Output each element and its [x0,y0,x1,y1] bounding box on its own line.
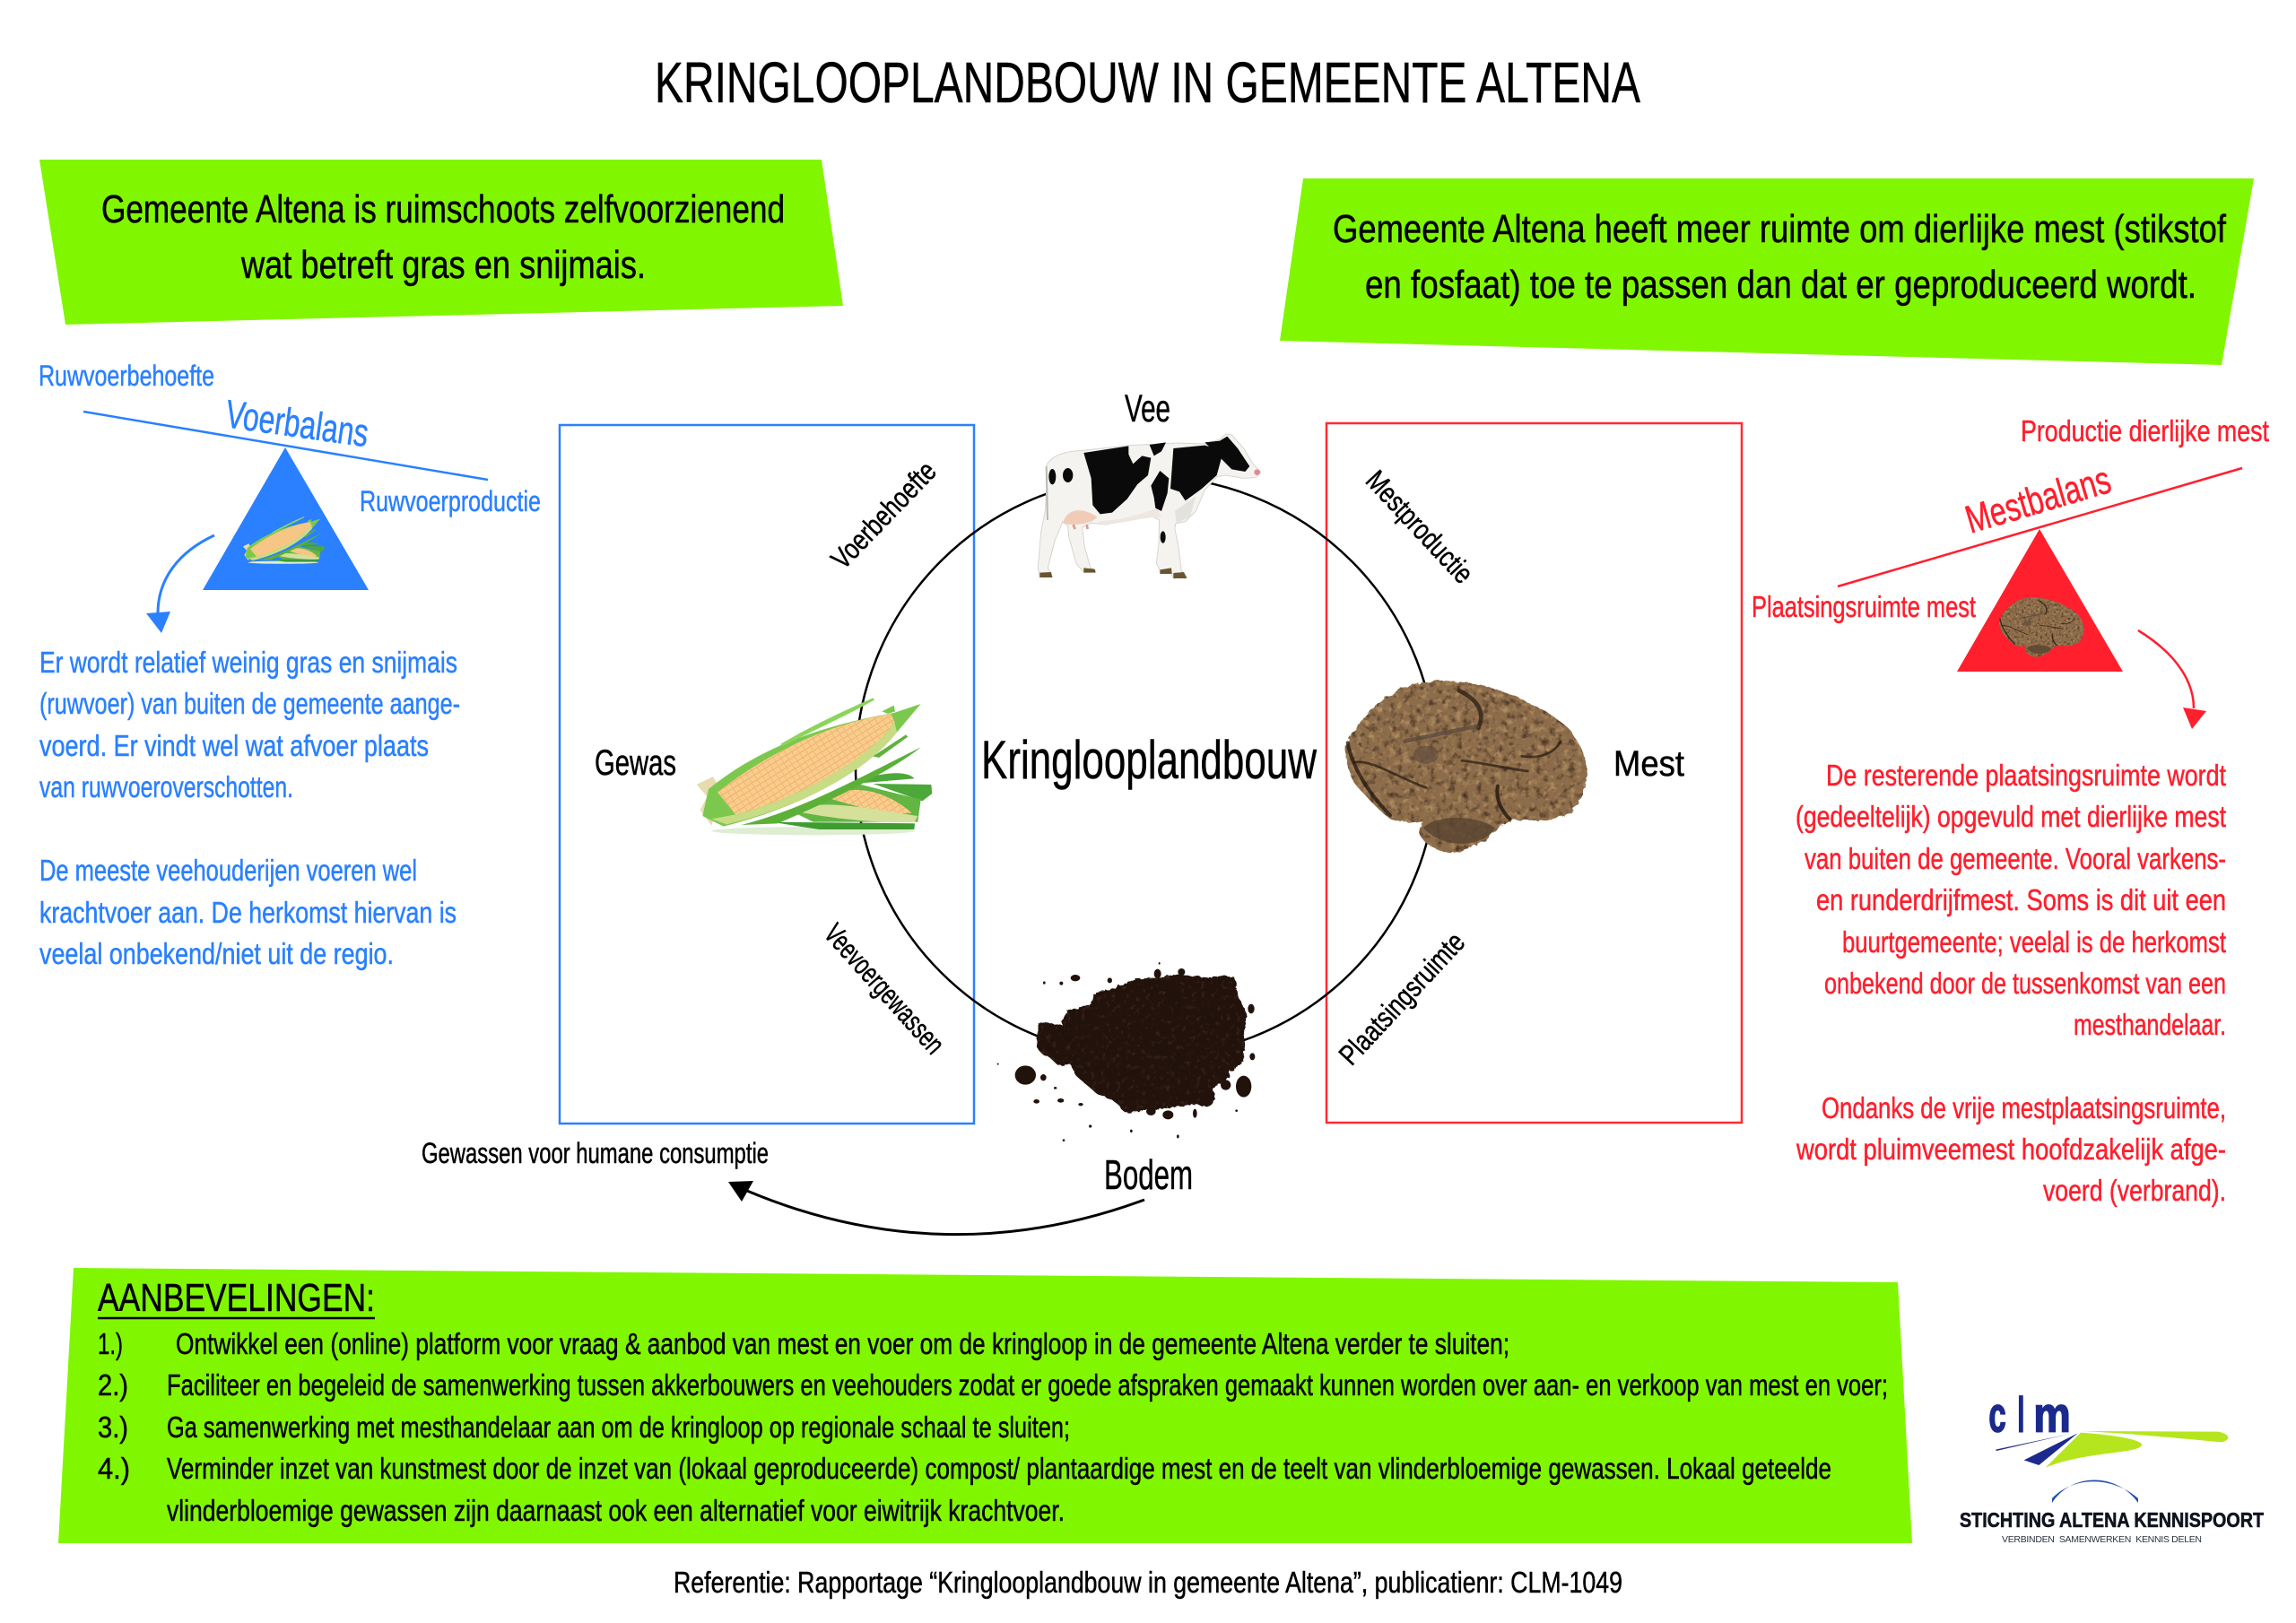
logo: clm [1988,1387,2228,1468]
panel: mestbalans diagram: Mestbalans [1961,457,2116,542]
text block: voerbalans toelichting: veelal onbekend/niet uit de regio. [39,937,394,970]
panel: gewas box [560,425,974,1124]
logo: clm: c [1988,1387,2006,1443]
text block: mestbalans toelichting [1796,759,2226,1207]
text block: mestbalans toelichting: voerd (verbrand). [2043,1174,2226,1207]
arrow: bodem naar gewassen [728,1181,1144,1235]
text block: voerbalans toelichting: Er wordt relatief weinig gras en snijmais [39,646,457,679]
logo: clm: m [2033,1387,2071,1443]
panel: zelfvoorzienend callout [39,160,843,325]
panel: voerbalans diagram: Ruwvoerproductie [360,485,541,517]
cycle ring [856,476,1437,1057]
icon: corn [697,698,932,835]
label: Gewas: Gewas [595,743,676,783]
panel: aanbevelingen: AANBEVELINGEN: [98,1276,375,1320]
text block: voerbalans toelichting: (ruwvoer) van buiten de gemeente aange- [39,687,460,720]
logo: clm: l [2017,1387,2024,1443]
panel: aanbevelingen: 2.) [98,1368,128,1402]
panel: aanbevelingen: vlinderbloemige gewassen zijn daarnaast ook een alternatief voor eiwitrijk krachtvoer. [167,1494,1065,1527]
text block: voerbalans toelichting: De meeste veehouderijen voeren wel [39,854,417,887]
text block: voerbalans toelichting [39,646,460,970]
label: Bodem: Bodem [1104,1151,1193,1198]
icon: manure [1345,680,1587,854]
label: Veevoergewassen: Veevoergewassen [818,917,951,1060]
text block: voerbalans toelichting: krachtvoer aan. De herkomst hiervan is [39,896,457,929]
logo: stichting altena kennispoort: VERBINDEN SAMENWERKEN KENNIS DELEN [2002,1534,2202,1545]
panel: mest callout [1280,178,2254,365]
label: Vee: Vee [1125,387,1170,430]
text block: voerbalans toelichting: voerd. Er vindt wel wat afvoer plaats [39,729,429,762]
panel: zelfvoorzienend callout: Gemeente Altena is ruimschoots zelfvoorzienend [101,187,785,231]
panel: aanbevelingen: Ga samenwerking met mesthandelaar aan om de kringloop op regionale schaal te sluiten; [167,1410,1070,1444]
label: Gewassen voor humane consumptie: Gewassen voor humane consumptie [422,1137,769,1169]
panel: aanbevelingen: Verminder inzet van kunstmest door de inzet van (lokaal geproduceerde) compost/ plantaardige mest en de teelt van vlinderbloemige gewassen. Lokaal geteelde [167,1452,1831,1485]
panel: voerbalans diagram: Voerbalans [223,392,371,456]
panel: aanbevelingen: Ontwikkel een (online) platform voor vraag & aanbod van mest en voer om de kringloop in de gemeente Altena verder te sluiten; [176,1327,1509,1360]
label: Mest: Mest [1613,744,1684,784]
panel: voerbalans diagram: Ruwvoerbehoefte [39,360,214,392]
icon: soil [997,962,1255,1141]
label: Voerbehoefte: Voerbehoefte [824,455,943,576]
panel: zelfvoorzienend callout: wat betreft gras en snijmais. [240,243,646,287]
title: KRINGLOOPLANDBOUW IN GEMEENTE ALTENA [655,50,1640,115]
icon: cow [1038,434,1261,578]
text block: referentie: Referentie: Rapportage “Kringlooplandbouw in gemeente Altena”, publicatienr: CLM-1049 [674,1566,1622,1599]
label: Plaatsingsruimte: Plaatsingsruimte [1333,925,1471,1072]
panel: mest box [1326,423,1742,1123]
panel: aanbevelingen [58,1268,1912,1543]
label: center Kringlooplandbouw: Kringlooplandbouw [981,730,1317,790]
panel: voerbalans diagram [39,360,541,633]
text block: mestbalans toelichting: mesthandelaar. [2074,1008,2226,1041]
panel: mestbalans diagram: Plaatsingsruimte mest [1752,590,1976,623]
panel: mestbalans diagram [1752,414,2269,729]
label: Mestproductie: Mestproductie [1360,464,1480,590]
text block: voerbalans toelichting: van ruwvoeroverschotten. [39,770,293,803]
logo: stichting altena kennispoort [1960,1480,2264,1545]
panel: aanbevelingen: 3.) [98,1410,128,1444]
panel: aanbevelingen: 4.) [98,1452,130,1485]
panel: aanbevelingen: 1.) [98,1327,123,1360]
